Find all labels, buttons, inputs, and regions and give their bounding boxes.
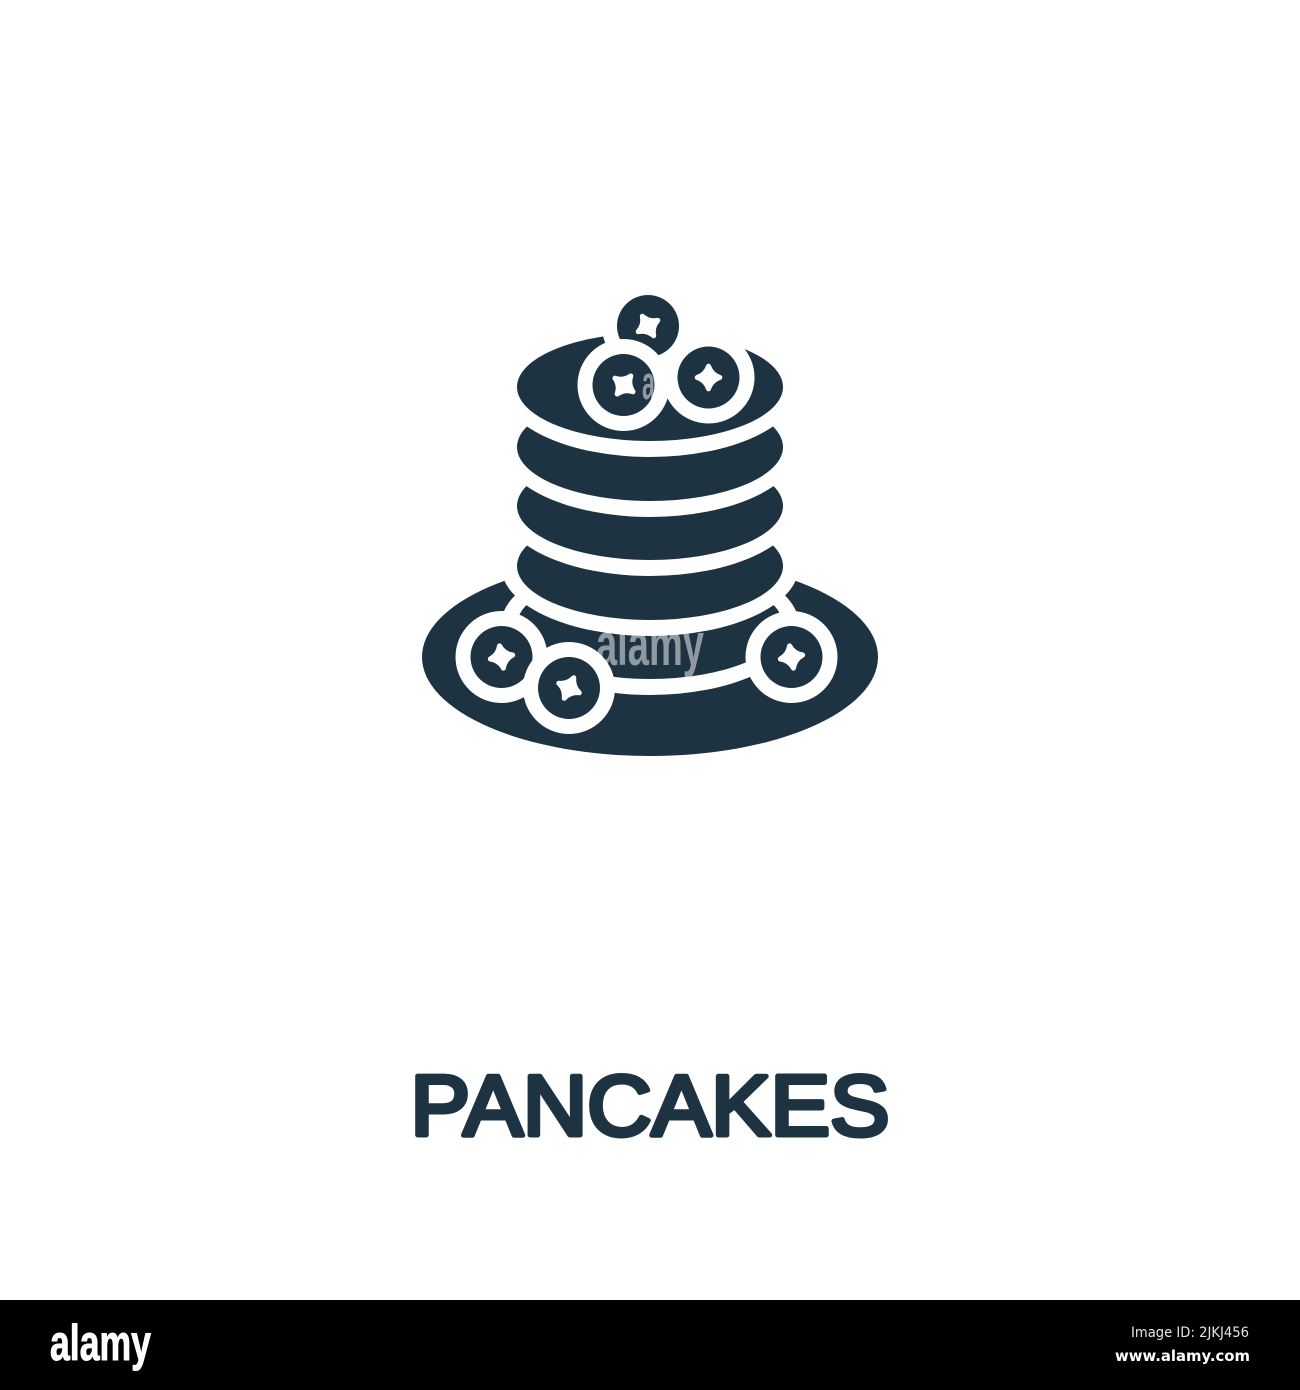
icon part: blueberry on top [602,280,694,372]
icon part: blueberry on plate right [746,611,838,703]
footer text: website: www.alamy.com [1115,1347,1250,1365]
icon part: bottom pancake [501,555,799,695]
icon part: plate [422,558,878,756]
icon part: top pancake [501,317,799,457]
icon part: blueberry right on pancake [662,332,754,424]
footer bar [0,1300,1300,1390]
watermark: alamy on plate: alamy [596,611,704,678]
icon part: fourth pancake [501,496,799,636]
icon part: blueberry left on pancake [578,339,670,431]
watermark letter on berry: a [642,356,655,409]
icon part: blueberry on plate left [456,611,548,703]
icon: pancake stack on a plate [422,280,878,756]
icon part: blueberry on plate front [523,642,615,734]
icon part: third pancake [501,436,799,576]
heading: PANCAKES: PANCAKES [410,1059,890,1154]
icon part: second pancake [501,377,799,517]
footer text: image id: Image ID: 2JKJ456 [1131,1325,1249,1341]
footer logo: alamy: alamy [50,1315,151,1371]
